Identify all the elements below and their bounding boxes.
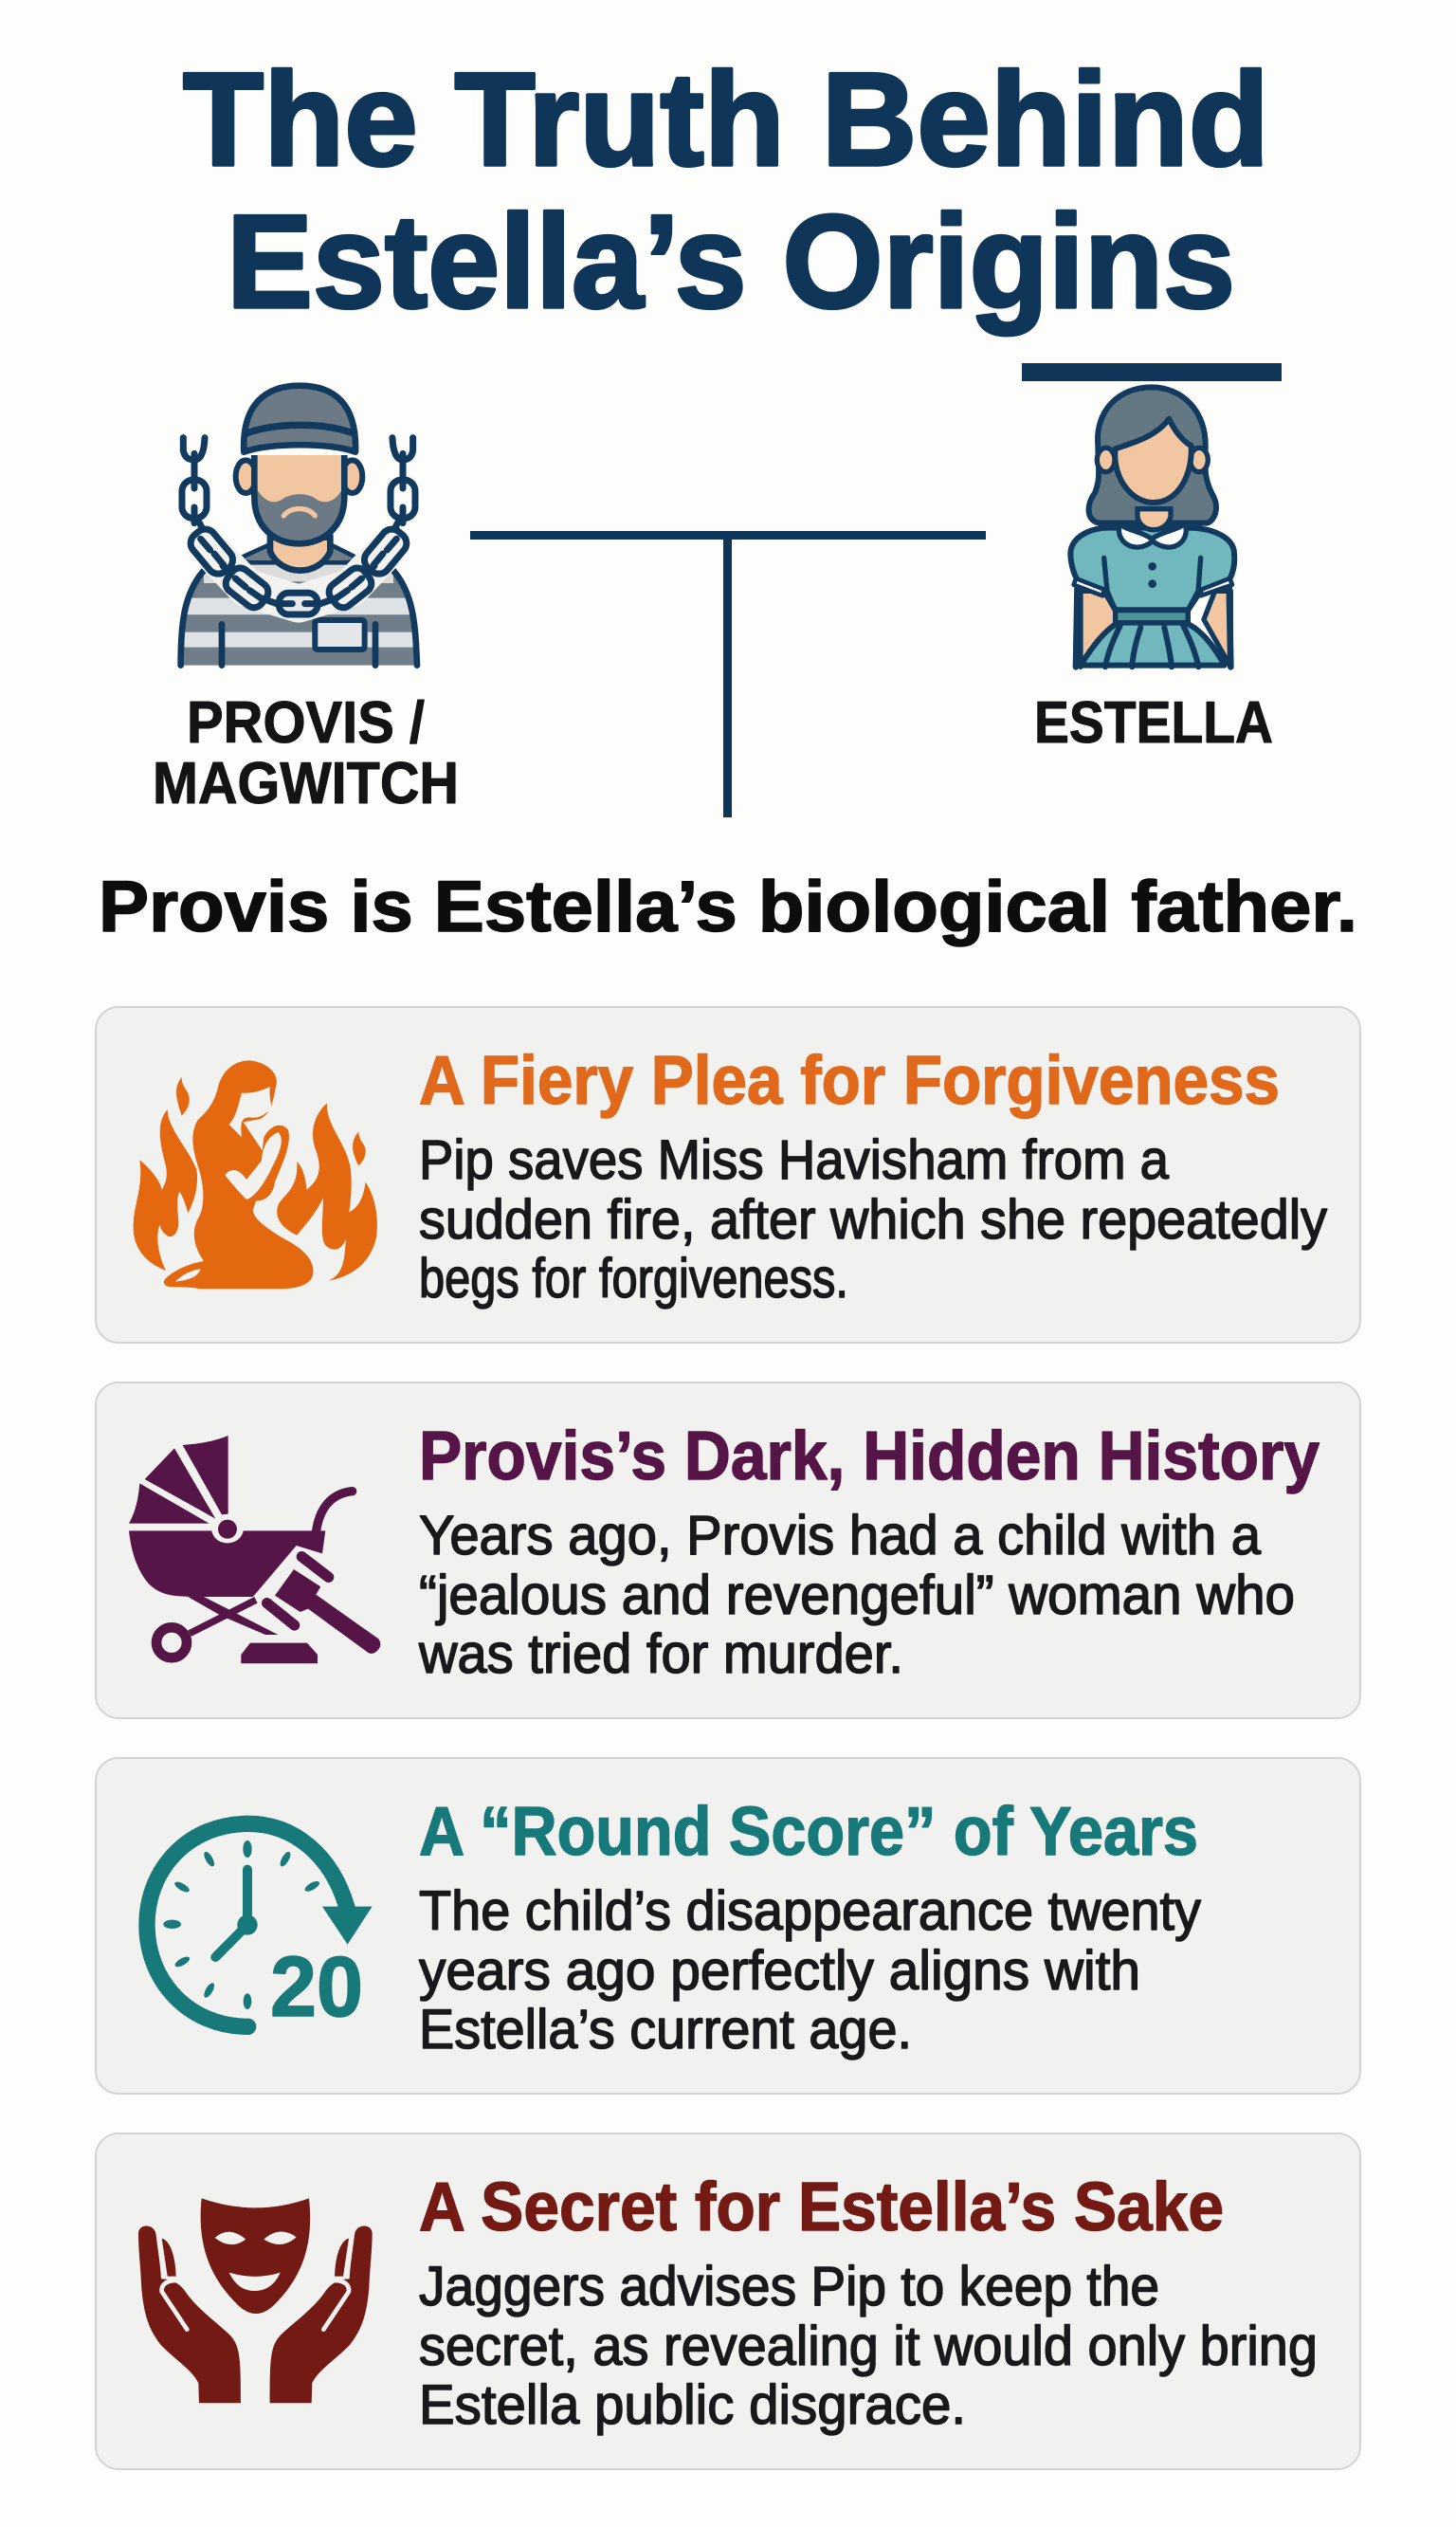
- description: sudden fire, after which she repeatedly: [419, 1189, 1327, 1251]
- statement: biological father: Provis is Estella’s biological father.: [99, 867, 1357, 947]
- description: Estella public disgrace.: [419, 2374, 966, 2436]
- label: Provis / Magwitch: MAGWITCH: [153, 751, 459, 816]
- description: was tried for murder.: [418, 1623, 903, 1685]
- description: secret, as revealing it would only bring: [419, 2316, 1318, 2377]
- icon: Provis in chains: [181, 386, 419, 666]
- icon: kneeling woman in flames: [134, 1060, 377, 1289]
- description: [419, 1880, 1201, 2060]
- description: begs for forgiveness.: [419, 1248, 848, 1309]
- icon: pram and gavel: [129, 1436, 380, 1663]
- icon: clock with 20: 20: [270, 1940, 363, 2035]
- heading: Provis’s Dark, Hidden History: [419, 1419, 1320, 1494]
- panel: A "Round Score" of Years: [96, 1758, 1360, 2094]
- description: [418, 1505, 1295, 1685]
- description: years ago perfectly aligns with: [419, 1940, 1140, 2002]
- heading: A “Round Score” of Years: [419, 1794, 1198, 1870]
- icon: Estella: [1070, 387, 1234, 667]
- description: Estella’s current age.: [419, 1999, 912, 2060]
- description: The child’s disappearance twenty: [419, 1880, 1201, 1942]
- description: Jaggers advises Pip to keep the: [419, 2256, 1159, 2317]
- description: [419, 2256, 1318, 2436]
- description: [419, 1129, 1327, 1309]
- icon: hands holding mask: [138, 2198, 373, 2403]
- description: “jealous and revengeful” woman who: [419, 1565, 1295, 1626]
- heading: A Secret for Estella’s Sake: [419, 2170, 1224, 2245]
- label: Estella: ESTELLA: [1034, 690, 1273, 756]
- title: The Truth Behind: [183, 45, 1269, 193]
- panel: Provis's Dark, Hidden History: [96, 1383, 1360, 1718]
- title: Estella’s Origins: [227, 187, 1235, 336]
- title: [183, 45, 1269, 336]
- label: Provis / Magwitch: [153, 690, 459, 816]
- connector: family tree lines: [470, 363, 1282, 817]
- description: Pip saves Miss Havisham from a: [419, 1129, 1170, 1191]
- label: Provis / Magwitch: PROVIS /: [187, 690, 425, 756]
- panel: A Secret for Estella's Sake: [96, 2133, 1360, 2469]
- icon: clock with 20: [147, 1823, 373, 2035]
- heading: A Fiery Plea for Forgiveness: [419, 1043, 1280, 1119]
- description: Years ago, Provis had a child with a: [419, 1505, 1262, 1566]
- panel: A Fiery Plea for Forgiveness: [96, 1007, 1360, 1343]
